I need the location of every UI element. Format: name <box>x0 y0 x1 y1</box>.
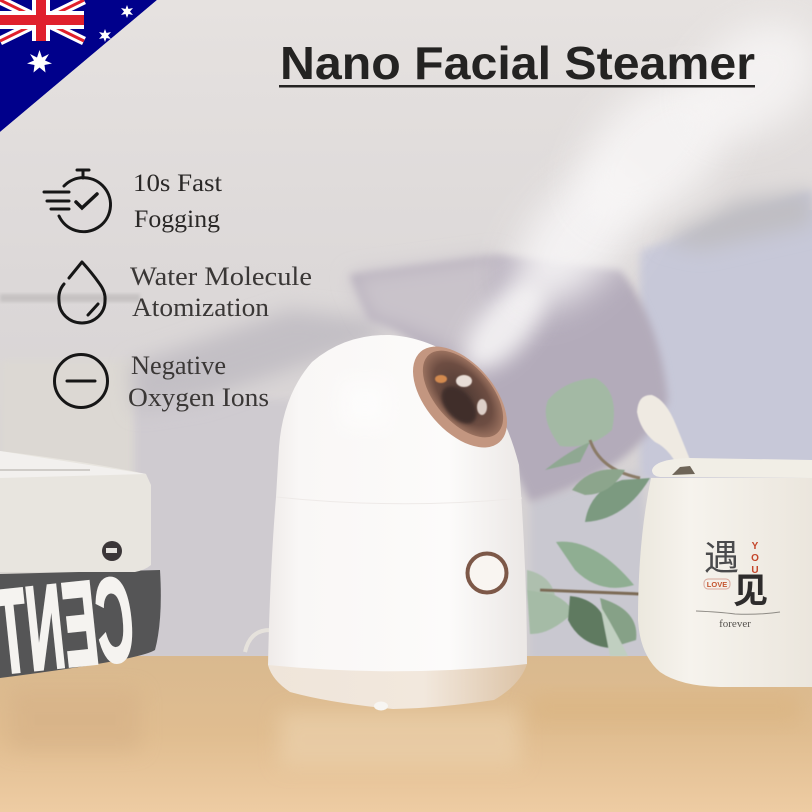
icon: water drop <box>59 262 105 323</box>
icon: stopwatch <box>44 170 111 232</box>
text: 10s fast fogging: Fogging <box>134 206 221 233</box>
title: Nano Facial Steamer <box>280 37 755 89</box>
lower dark book <box>0 552 161 699</box>
text: 10s fast fogging: 10s Fast <box>133 170 222 197</box>
mug lettering: 见 <box>733 572 768 611</box>
mug lettering: LOVE <box>707 580 727 589</box>
feature: 10s fast fogging <box>44 170 222 233</box>
text: water molecule atomization: Water Molecule <box>130 262 312 291</box>
mug lettering: U <box>751 565 759 576</box>
text: 10s fast fogging <box>133 170 222 233</box>
Australian flag corner <box>0 0 157 132</box>
mug lettering: Y <box>752 541 759 552</box>
mug lettering: 遇 <box>704 539 739 578</box>
right pale cushion <box>640 190 812 480</box>
green leaves <box>527 378 650 656</box>
flag stars <box>27 5 133 72</box>
device shell <box>268 335 527 671</box>
feature: water molecule atomization <box>59 262 312 323</box>
mug lettering: O <box>751 553 759 564</box>
mug lettering <box>696 539 780 630</box>
facial steamer device <box>245 329 527 710</box>
power button <box>468 554 506 592</box>
icon: minus circle <box>54 354 108 408</box>
device base <box>268 664 527 709</box>
feature: negative oxygen ions <box>54 351 269 412</box>
mug lid <box>652 458 812 478</box>
coffee mug with spoon <box>637 395 812 687</box>
spoon <box>637 395 695 476</box>
purple cushion <box>350 255 668 502</box>
upper white box <box>0 451 151 572</box>
rose gold nozzle <box>395 329 525 465</box>
text: water molecule atomization: Atomization <box>132 293 269 322</box>
steam cloud <box>450 0 812 384</box>
text: negative oxygen ions: Oxygen Ions <box>128 383 269 412</box>
power cord <box>245 630 270 652</box>
books <box>0 451 161 699</box>
text: negative oxygen ions: Negative <box>131 351 226 380</box>
mug lettering: forever <box>719 618 751 630</box>
union jack <box>0 0 84 41</box>
text: negative oxygen ions <box>128 351 269 412</box>
mug body <box>638 478 812 687</box>
wooden table <box>0 656 812 812</box>
text: water molecule atomization <box>130 262 312 322</box>
